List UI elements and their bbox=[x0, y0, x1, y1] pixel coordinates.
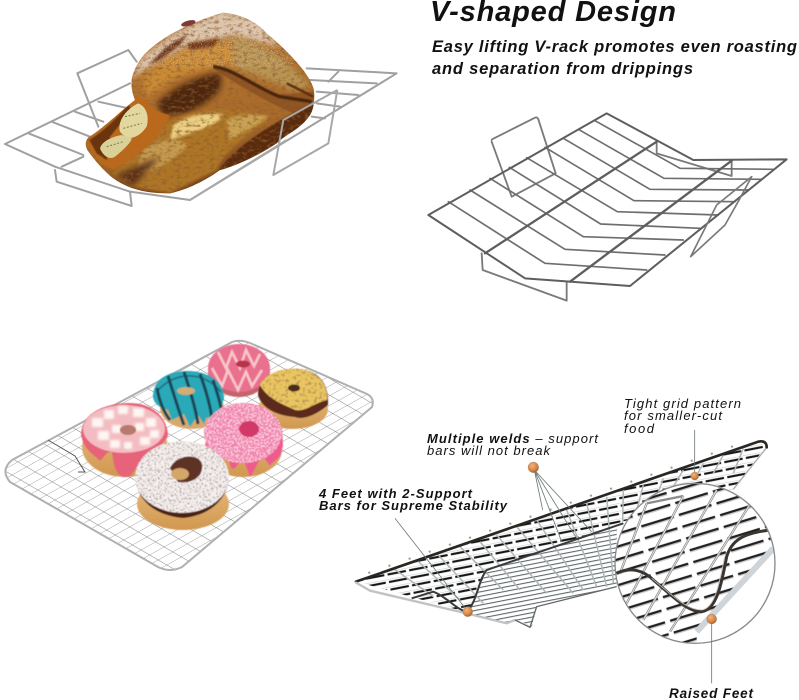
callout dots bbox=[463, 462, 717, 624]
donut: yellow crumb bbox=[258, 369, 328, 429]
description text: Easy lifting V-rack promotes even roasting bbox=[432, 38, 797, 56]
callout: tight grid bbox=[624, 396, 741, 436]
donut: pink sprinkles bbox=[204, 403, 283, 477]
dark breast patch bbox=[157, 73, 222, 117]
fan of support wires bbox=[393, 448, 743, 603]
stuffing bbox=[119, 103, 148, 138]
panel: annotated rack detail bbox=[350, 430, 780, 683]
support bar and feet bbox=[412, 523, 623, 612]
thigh and drumstick bbox=[112, 109, 270, 193]
magnified circle bbox=[614, 482, 776, 644]
dark lower skin bbox=[218, 103, 315, 172]
wing and crease bbox=[213, 68, 315, 113]
callout: four feet: Bars for Supreme Stability bbox=[319, 498, 508, 513]
callout: multiple welds bbox=[427, 431, 599, 458]
description text: and separation from drippings bbox=[432, 60, 693, 78]
callout: tight grid: food bbox=[624, 421, 655, 436]
blotch texture bbox=[83, 10, 320, 197]
panel: V-shaped rack bbox=[428, 113, 787, 301]
panel: turkey on rack bbox=[5, 10, 397, 206]
callout: four feet bbox=[318, 486, 508, 513]
rim ticks bbox=[368, 443, 743, 573]
turkey bbox=[83, 10, 320, 197]
pale dusted top bbox=[128, 12, 280, 80]
wire rack under turkey bbox=[5, 50, 397, 206]
description text bbox=[432, 38, 797, 78]
rack body with tight grid bbox=[350, 433, 770, 630]
front rack bars and handle bbox=[190, 90, 337, 200]
dense lower wires bbox=[468, 523, 622, 627]
donut: strawberry with marshmallow bbox=[81, 403, 168, 477]
cavity bbox=[86, 97, 170, 170]
ribs bbox=[448, 121, 773, 270]
panel: donuts on cooling rack bbox=[0, 335, 380, 575]
callout: multiple welds: bars will not break bbox=[427, 443, 552, 458]
donut: coconut bbox=[135, 441, 229, 530]
callout: multiple welds: Multiple welds – support bbox=[427, 431, 599, 446]
callout: tight grid: Tight grid pattern bbox=[624, 396, 741, 411]
frame bbox=[428, 113, 787, 286]
rim bbox=[356, 441, 767, 582]
callout: four feet: 4 Feet with 2-Support bbox=[318, 486, 473, 501]
callout: tight grid: for smaller-cut bbox=[624, 408, 723, 423]
leader lines bbox=[395, 430, 712, 683]
donut: teal bbox=[153, 371, 224, 429]
back foot and left handle bbox=[482, 117, 732, 301]
white area beyond rim bbox=[696, 552, 774, 641]
donut: pink striped bbox=[208, 344, 270, 397]
cooling rack grid bbox=[0, 335, 380, 575]
right handle bbox=[691, 177, 752, 257]
